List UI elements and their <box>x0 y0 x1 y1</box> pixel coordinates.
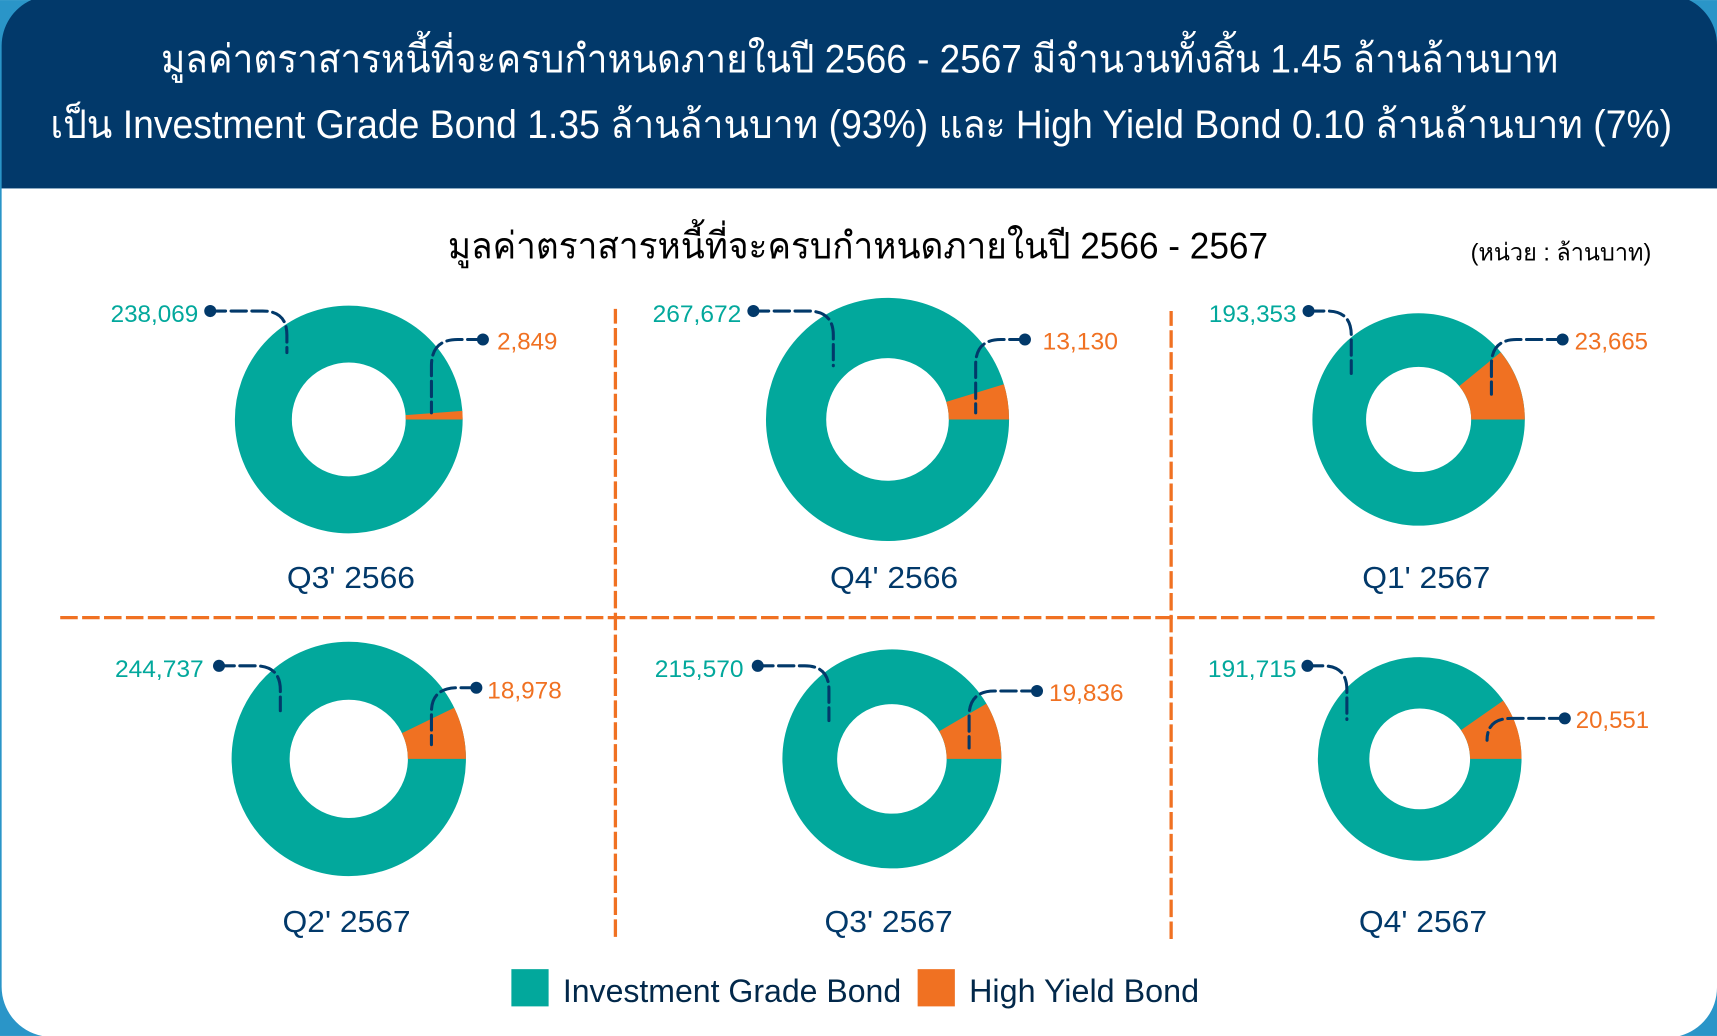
legend swatch: high yield <box>918 969 955 1006</box>
leader: investment grade <box>1303 305 1351 373</box>
leader: high yield <box>431 333 489 413</box>
value: high yield: 23,665 <box>1575 328 1648 355</box>
leader: high yield <box>431 682 482 745</box>
value: investment grade: 267,672 <box>653 301 741 328</box>
leader: investment grade <box>213 660 280 711</box>
panel: Q1 2567 <box>1209 301 1648 595</box>
quarter label: Q1' 2567 <box>1362 561 1490 595</box>
value: high yield: 18,978 <box>487 678 562 705</box>
donut chart <box>796 328 1009 511</box>
quarter label: Q2' 2567 <box>283 905 411 939</box>
horizontal grid divider <box>60 616 1656 619</box>
donut chart <box>1339 340 1525 499</box>
value: high yield: 2,849 <box>497 328 557 355</box>
header banner <box>2 0 1717 188</box>
leader: high yield <box>969 685 1043 748</box>
donut chart <box>263 334 463 505</box>
leader: high yield <box>1491 333 1569 394</box>
vertical grid divider right <box>1170 311 1173 940</box>
chart section heading: มูลค่าตราสารหนี้ที่จะครบกำหนดภายในปี 2566 - 2567 <box>448 218 1268 268</box>
value: investment grade: 215,570 <box>655 656 744 683</box>
quarter label: Q4' 2567 <box>1359 905 1487 939</box>
donut chart <box>1344 683 1522 835</box>
panel: Q4 2567 <box>1208 656 1649 939</box>
donut chart <box>261 671 466 847</box>
value: investment grade: 238,069 <box>111 301 198 328</box>
value: high yield: 13,130 <box>1042 328 1118 355</box>
leader: investment grade <box>204 305 287 353</box>
headline line 2: เป็น Investment Grade Bond 1.35 ล้านล้านบาท (93%) และ High Yield Bond 0.10 ล้านล้านบาท (7%) <box>50 101 1672 147</box>
value: high yield: 20,551 <box>1576 707 1649 734</box>
legend swatch: investment grade <box>511 969 549 1006</box>
panel: Q2 2567 <box>115 656 562 939</box>
leader: high yield <box>976 333 1031 413</box>
quarter label: Q4' 2566 <box>830 561 958 595</box>
legend label: high yield: High Yield Bond <box>969 972 1199 1009</box>
unit note: (หน่วย : ล้านบาท) <box>1471 240 1651 267</box>
leader: high yield <box>1487 712 1571 740</box>
quarter label: Q3' 2566 <box>287 561 415 595</box>
panel: Q4 2566 <box>653 301 1118 595</box>
value: investment grade: 191,715 <box>1208 656 1297 683</box>
value: investment grade: 193,353 <box>1209 301 1297 328</box>
leader: investment grade <box>752 660 829 721</box>
quarter label: Q3' 2567 <box>825 905 953 939</box>
leader: investment grade <box>747 305 833 366</box>
panel: Q3 2566 <box>111 301 557 595</box>
legend <box>511 969 1199 1009</box>
headline line 1: มูลค่าตราสารหนี้ที่จะครบกำหนดภายในปี 2566 - 2567 มีจำนวนทั้งสิ้น 1.45 ล้านล้านบาท <box>161 30 1558 82</box>
value: high yield: 19,836 <box>1049 680 1123 707</box>
value: investment grade: 244,737 <box>115 656 204 683</box>
donut chart <box>810 677 1001 841</box>
leader: investment grade <box>1301 660 1347 719</box>
vertical grid divider left <box>614 309 617 937</box>
legend label: investment grade: Investment Grade Bond <box>563 972 901 1009</box>
panel: Q3 2567 <box>655 656 1123 939</box>
